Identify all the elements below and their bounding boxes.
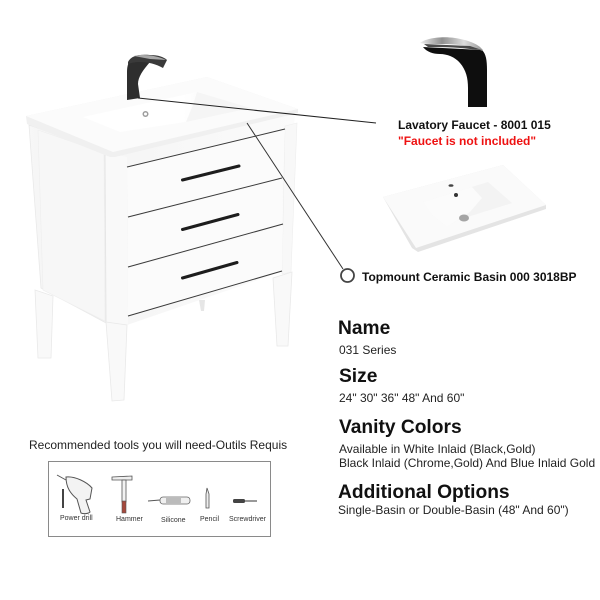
ceramic basin product photo — [383, 165, 546, 252]
heading: name: Name — [338, 318, 390, 339]
faucet product photo — [420, 37, 487, 107]
heading: additional options: Additional Options — [338, 482, 510, 503]
icon: pencil — [206, 488, 209, 508]
faucet holes — [448, 184, 454, 187]
cabinet side panel — [29, 125, 106, 323]
tools panel — [48, 461, 271, 537]
right stile — [282, 123, 297, 274]
overflow — [142, 111, 148, 117]
left leg — [35, 290, 53, 358]
drawer handles — [182, 166, 239, 278]
front stile — [105, 152, 128, 325]
heading: vanity colors: Vanity Colors — [339, 417, 462, 438]
vanity cabinet — [29, 112, 297, 401]
tool labels — [60, 515, 267, 524]
tool labels: Screwdriver — [229, 516, 267, 523]
text: series: 031 Series — [339, 343, 396, 357]
right leg — [273, 272, 292, 346]
tool labels: Hammer — [116, 516, 144, 523]
leader line: faucet — [138, 98, 376, 123]
icon: screwdriver — [233, 499, 257, 503]
drawer gap lines — [127, 129, 285, 316]
leader line: basin — [247, 123, 343, 269]
label: faucet not included: "Faucet is not included" — [398, 134, 536, 148]
basin drain — [459, 214, 469, 222]
tool labels: Pencil — [200, 516, 220, 523]
label: ceramic basin: Topmount Ceramic Basin 000 3018BP — [362, 270, 577, 284]
heading: size: Size — [339, 366, 377, 387]
text: sizes: 24" 30" 36" 48" And 60" — [339, 391, 464, 405]
icon: power drill — [57, 475, 92, 514]
faucet on vanity — [127, 55, 167, 100]
tool icons — [56, 474, 267, 524]
tools heading: Recommended tools you will need-Outils Requis — [29, 438, 287, 452]
sink bowl — [83, 92, 250, 132]
text: colors: Available in White Inlaid (Black,Gold) — [339, 442, 536, 456]
tool labels: Silicone — [161, 517, 186, 524]
back leg — [199, 300, 205, 311]
front leg — [106, 322, 127, 401]
text: options: Single-Basin or Double-Basin (48" And 60") — [338, 503, 569, 517]
label: lavatory faucet: Lavatory Faucet - 8001 015 — [398, 118, 551, 132]
text: colors — [339, 442, 595, 470]
text: colors: Black Inlaid (Chrome,Gold) And Blue Inlaid Gold — [339, 456, 595, 470]
tool labels: Power drill — [60, 515, 93, 522]
drawer fronts — [127, 129, 285, 217]
icon: hammer — [112, 476, 132, 513]
countertop basin — [26, 77, 298, 157]
circle marker — [341, 269, 354, 282]
cabinet front — [105, 112, 295, 325]
icon: silicone — [148, 497, 190, 504]
